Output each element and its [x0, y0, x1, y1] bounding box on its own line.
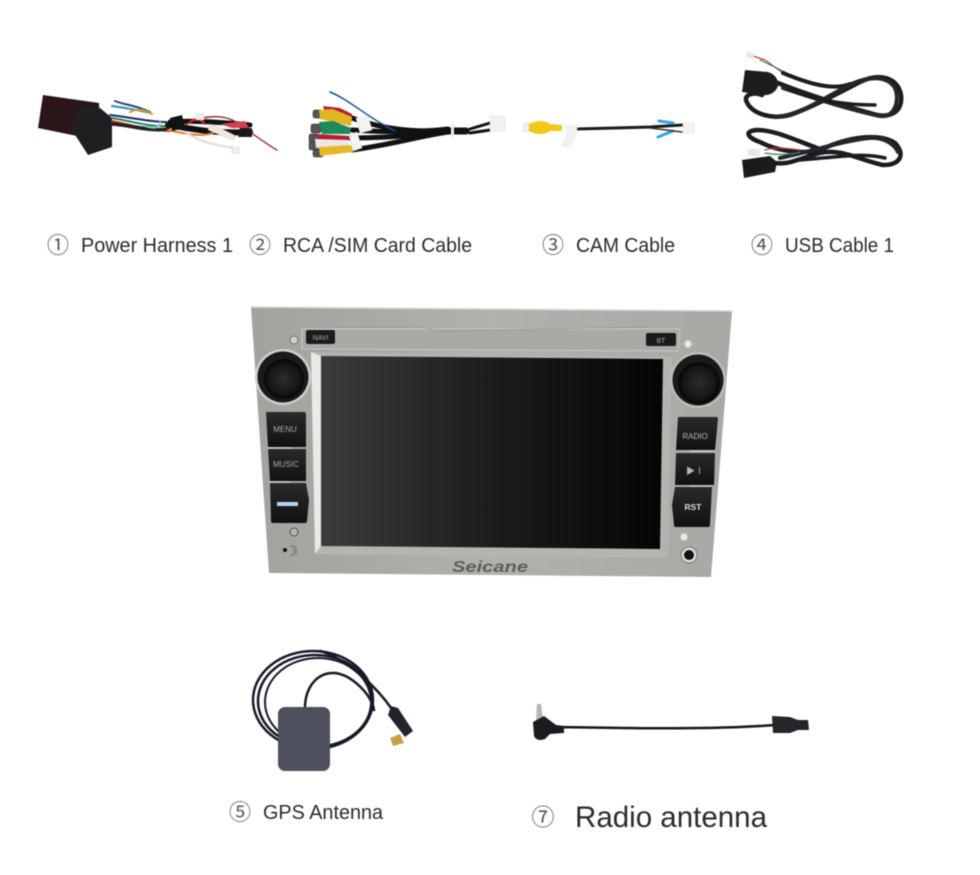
right button column	[672, 417, 718, 527]
right button column: ▶Ⅰ	[686, 466, 704, 476]
caption 7: ⑦	[532, 804, 554, 830]
white connector	[683, 123, 694, 133]
end connector	[772, 716, 809, 733]
black connector	[72, 106, 112, 155]
NAVI button	[306, 330, 335, 344]
caption 1: ①	[47, 233, 69, 258]
angled plug body	[533, 716, 564, 740]
cable tags and connector	[356, 116, 372, 133]
audio jack	[681, 547, 697, 563]
car stereo head unit	[251, 307, 732, 577]
blue antenna wire	[330, 92, 395, 131]
caption 4: USB Cable 1	[785, 235, 894, 257]
item 1: power harness photo	[38, 95, 277, 155]
caption 3: CAM Cable	[576, 235, 675, 257]
right knob	[670, 352, 726, 408]
caption 5: GPS Antenna	[263, 802, 384, 824]
right button column: RADIO	[682, 432, 708, 441]
item 3: CAM cable photo	[523, 121, 694, 147]
BT button: BT	[657, 338, 666, 345]
caption 4	[751, 233, 894, 258]
cable	[555, 725, 775, 728]
item 4: USB cables photo	[742, 51, 901, 178]
RCA barrels	[309, 110, 323, 157]
antenna puck	[278, 707, 330, 771]
caption 2: ②	[249, 233, 271, 258]
screen bezel	[311, 352, 672, 558]
silver faceplate	[251, 307, 732, 577]
black cable	[577, 125, 682, 129]
black cable bundle	[350, 118, 490, 150]
cable loops	[253, 651, 391, 749]
caption 5: ⑤	[229, 800, 251, 825]
upper recess	[302, 329, 680, 351]
yellow RCA plug	[523, 123, 529, 132]
left knob	[255, 349, 311, 405]
Seicane logo: Seicane	[452, 559, 528, 576]
connectors on harness	[170, 115, 185, 131]
screen	[321, 356, 663, 549]
left button column: MENU	[273, 425, 297, 434]
item 5: GPS antenna photo	[253, 651, 413, 771]
top USB cable	[742, 51, 901, 117]
caption 3	[542, 233, 675, 258]
BT button	[646, 333, 676, 346]
harness wires	[110, 101, 277, 150]
blue wire sleeves	[658, 121, 673, 137]
angled plug tip	[536, 704, 543, 720]
NAVI button: NAVI	[313, 335, 328, 342]
SMA connector	[388, 706, 413, 737]
caption 2: RCA /SIM Card Cable	[283, 235, 472, 257]
item 7: radio antenna photo	[533, 704, 809, 740]
caption 4: ④	[751, 233, 773, 258]
left button column: MUSIC	[273, 460, 299, 469]
RCA plugs	[323, 106, 352, 120]
white tag	[562, 126, 577, 147]
item 2: RCA / SIM card cable photo	[309, 92, 505, 157]
caption 7: Radio antenna	[575, 801, 767, 834]
right button column: RST	[684, 502, 702, 512]
bottom USB cable	[742, 130, 901, 178]
dark module box	[38, 95, 100, 136]
caption 1: Power Harness 1	[81, 235, 233, 257]
caption 3: ③	[542, 233, 564, 258]
caption 5	[229, 800, 384, 825]
screws and lights	[283, 336, 692, 555]
left button column	[266, 412, 309, 523]
